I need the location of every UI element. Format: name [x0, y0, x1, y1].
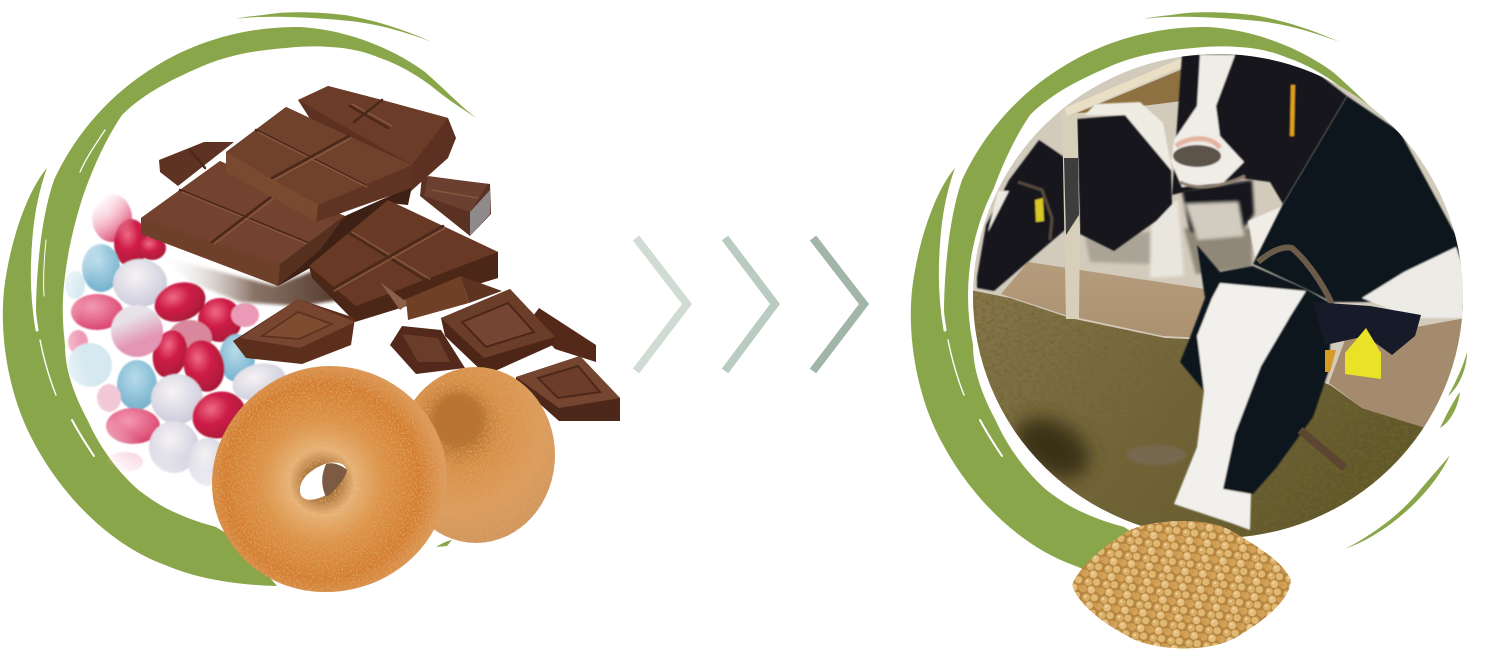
chocolate: back right square	[420, 176, 491, 236]
foreground cow body	[1253, 96, 1470, 318]
chocolate: small piece left	[390, 326, 465, 374]
soybean pile	[1072, 521, 1291, 648]
barn rafters	[1077, 70, 1182, 113]
left cow head	[977, 140, 1065, 291]
arrows: three chevrons	[636, 238, 864, 371]
chevron 3	[813, 238, 864, 371]
white gap beside photo	[968, 55, 1458, 537]
trough left	[1001, 262, 1205, 338]
collar	[1258, 248, 1332, 304]
puddle on floor	[1126, 445, 1186, 465]
panel: confectionery and bakery by-products	[3, 12, 620, 592]
chocolate shadow	[160, 256, 340, 306]
upper cow	[1171, 52, 1347, 257]
chevron 1	[636, 238, 687, 371]
brush streaks	[940, 240, 1002, 456]
background legs	[1085, 180, 1254, 278]
ear tag	[1325, 328, 1381, 379]
chocolate: lower right bar	[309, 200, 498, 322]
chocolate: small piece right	[530, 308, 596, 362]
chocolate: left bar	[141, 161, 345, 286]
chocolate: centre square	[441, 289, 555, 375]
barn background	[970, 50, 1466, 542]
foreground cow head	[1174, 245, 1332, 530]
brush circle: left green swoosh	[3, 12, 478, 586]
bagel: front	[212, 366, 447, 592]
chocolate: top bar	[226, 107, 412, 222]
brush streaks	[32, 130, 105, 456]
barn post	[1062, 58, 1184, 319]
chocolate: rear bar	[298, 86, 456, 192]
trough right	[1329, 319, 1470, 428]
wooden strap	[1300, 430, 1345, 468]
ear	[1313, 302, 1421, 355]
chocolate: broken piece	[406, 276, 502, 320]
background cow body	[1077, 102, 1172, 251]
chocolate: back left square	[159, 142, 234, 186]
panel: dairy cattle feed	[911, 12, 1470, 648]
candies	[65, 194, 290, 486]
brush circle: right green swoosh	[911, 12, 1467, 586]
chevron 2	[725, 238, 775, 371]
shadow in straw	[1010, 408, 1098, 487]
bagel: rear	[397, 367, 555, 543]
photo: cows feeding in barn	[970, 50, 1470, 545]
chocolate: bottom right square	[516, 356, 620, 421]
floor of straw	[973, 290, 1424, 537]
chocolate: foreground cube	[233, 299, 355, 364]
chocolate: dark filler between bars	[278, 186, 412, 286]
